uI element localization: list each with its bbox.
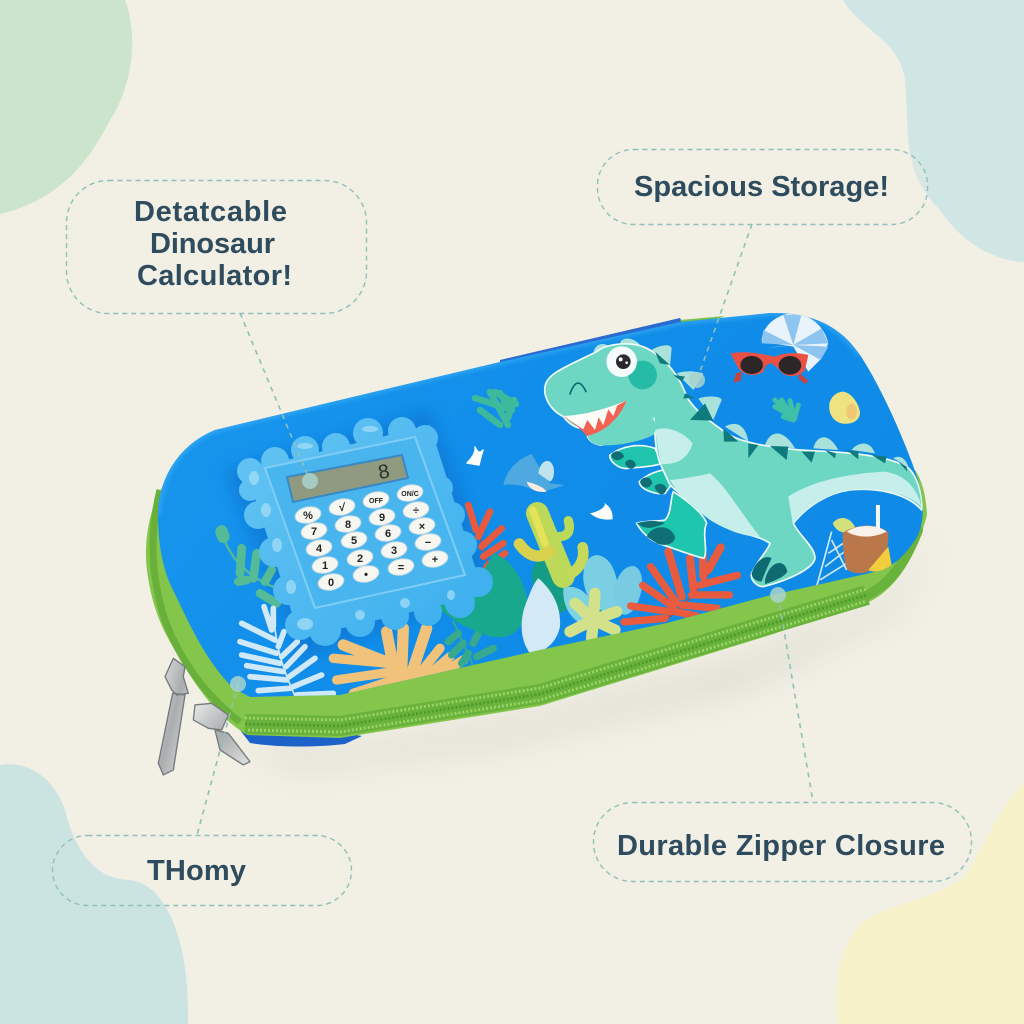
right zipper pull xyxy=(193,703,250,765)
cactus xyxy=(519,510,583,577)
dino far leg xyxy=(637,492,707,558)
button legends: = xyxy=(398,562,404,574)
calculator screen xyxy=(287,455,408,502)
calculator pocket shadow xyxy=(225,410,500,660)
connector: storage xyxy=(697,224,752,380)
left foliage artwork xyxy=(222,505,505,700)
callout text: brand: THomy xyxy=(147,855,246,887)
green small frond xyxy=(448,622,493,667)
back green piping xyxy=(680,316,725,326)
callout text: calculator xyxy=(134,196,292,292)
button legends: 3 xyxy=(391,545,397,557)
blue lid xyxy=(158,313,923,697)
button legends: 1 xyxy=(322,560,328,572)
case shadow xyxy=(240,530,935,770)
orange frond xyxy=(624,547,737,622)
calculator face xyxy=(265,437,465,608)
button legends: − xyxy=(425,537,431,549)
button legends xyxy=(303,491,438,589)
button legends: 6 xyxy=(385,528,391,540)
leaves: pale blue xyxy=(522,578,560,653)
callout text: calculator: Dinosaur xyxy=(150,228,275,260)
leaves: large teal plant xyxy=(433,553,528,637)
dino body and head xyxy=(545,344,922,587)
button legends: 4 xyxy=(316,543,323,555)
button legends: 0 xyxy=(328,577,334,589)
lid edge shading xyxy=(158,313,860,515)
footprint upper xyxy=(590,503,613,520)
callout: brand xyxy=(52,836,352,906)
callout text: storage: Spacious Storage! xyxy=(634,171,889,203)
button legends: 5 xyxy=(351,535,357,547)
blob: bottom right xyxy=(837,783,1024,1024)
lime slice xyxy=(833,518,856,533)
calculator xyxy=(237,417,493,646)
dino plates xyxy=(593,339,908,467)
button legends: + xyxy=(432,554,438,566)
top green fern xyxy=(475,392,516,425)
egg spots xyxy=(846,404,857,420)
right artwork xyxy=(433,313,922,653)
callout text: calculator: Calculator! xyxy=(137,260,292,292)
small footprint near calculator xyxy=(467,447,483,465)
callout: zipper xyxy=(594,802,972,882)
leaves: dark round xyxy=(532,558,567,613)
fern small right xyxy=(775,400,798,420)
bottom shell xyxy=(240,725,362,746)
dino hind foot xyxy=(752,557,787,584)
callout text: zipper: Durable Zipper Closure xyxy=(617,830,945,862)
button legends: • xyxy=(364,569,368,581)
pencil case xyxy=(146,313,927,775)
pale feather frond xyxy=(240,607,333,700)
far foot toes xyxy=(637,521,675,545)
beach umbrella xyxy=(762,313,828,372)
button legends: % xyxy=(303,510,313,522)
dino lower jaw xyxy=(587,418,656,445)
leaves: sky blue xyxy=(583,555,619,612)
arm claws xyxy=(611,451,667,494)
dino cheek xyxy=(628,361,657,389)
zipper pulls xyxy=(158,658,250,775)
button legends: OFF xyxy=(369,498,384,505)
button legends: × xyxy=(419,521,425,533)
connector: zipper xyxy=(778,595,813,802)
callout: calculator xyxy=(66,180,366,314)
calculator scalloped body xyxy=(237,417,493,646)
dino arms xyxy=(610,446,675,494)
button legends: 7 xyxy=(311,526,317,538)
back shell xyxy=(500,318,684,364)
button legends: ÷ xyxy=(413,505,419,517)
dino back spikes xyxy=(655,352,907,472)
callout text: calculator: Detatcable xyxy=(134,196,287,228)
connector: brand xyxy=(197,684,238,835)
button legends: √ xyxy=(339,502,346,514)
blob: bottom left xyxy=(0,764,188,1024)
golden palm frond xyxy=(333,628,463,693)
coconut drink xyxy=(843,505,892,573)
button legends: 2 xyxy=(357,553,363,565)
lid artwork xyxy=(158,313,922,700)
left zipper pull xyxy=(158,658,188,775)
blob: top right xyxy=(843,0,1024,262)
egg xyxy=(829,392,860,424)
dino bellies xyxy=(655,429,922,537)
calculator highlights xyxy=(249,426,455,630)
dino teeth xyxy=(563,401,627,430)
calculator buttons xyxy=(294,482,449,593)
connector: calculator xyxy=(240,313,310,481)
screen digit: 8 xyxy=(376,460,392,484)
dino mouth xyxy=(563,401,627,436)
button legends: 8 xyxy=(345,519,351,531)
marker dots xyxy=(230,372,786,692)
callout: storage xyxy=(598,150,928,224)
striped coconut grass xyxy=(817,532,847,587)
green zipper tape xyxy=(146,470,927,738)
red frond beside calculator xyxy=(468,505,505,580)
dino closed eye xyxy=(570,383,586,394)
dino eye xyxy=(606,346,637,377)
button legends: ON/C xyxy=(401,491,419,498)
flower: yellow-green xyxy=(570,593,617,638)
sunglasses xyxy=(731,352,808,384)
green frond behind calculator xyxy=(222,532,277,603)
stingray fish xyxy=(503,454,565,492)
blob: top left xyxy=(0,0,132,214)
button legends: 9 xyxy=(379,512,385,524)
zipper teeth xyxy=(153,490,918,732)
